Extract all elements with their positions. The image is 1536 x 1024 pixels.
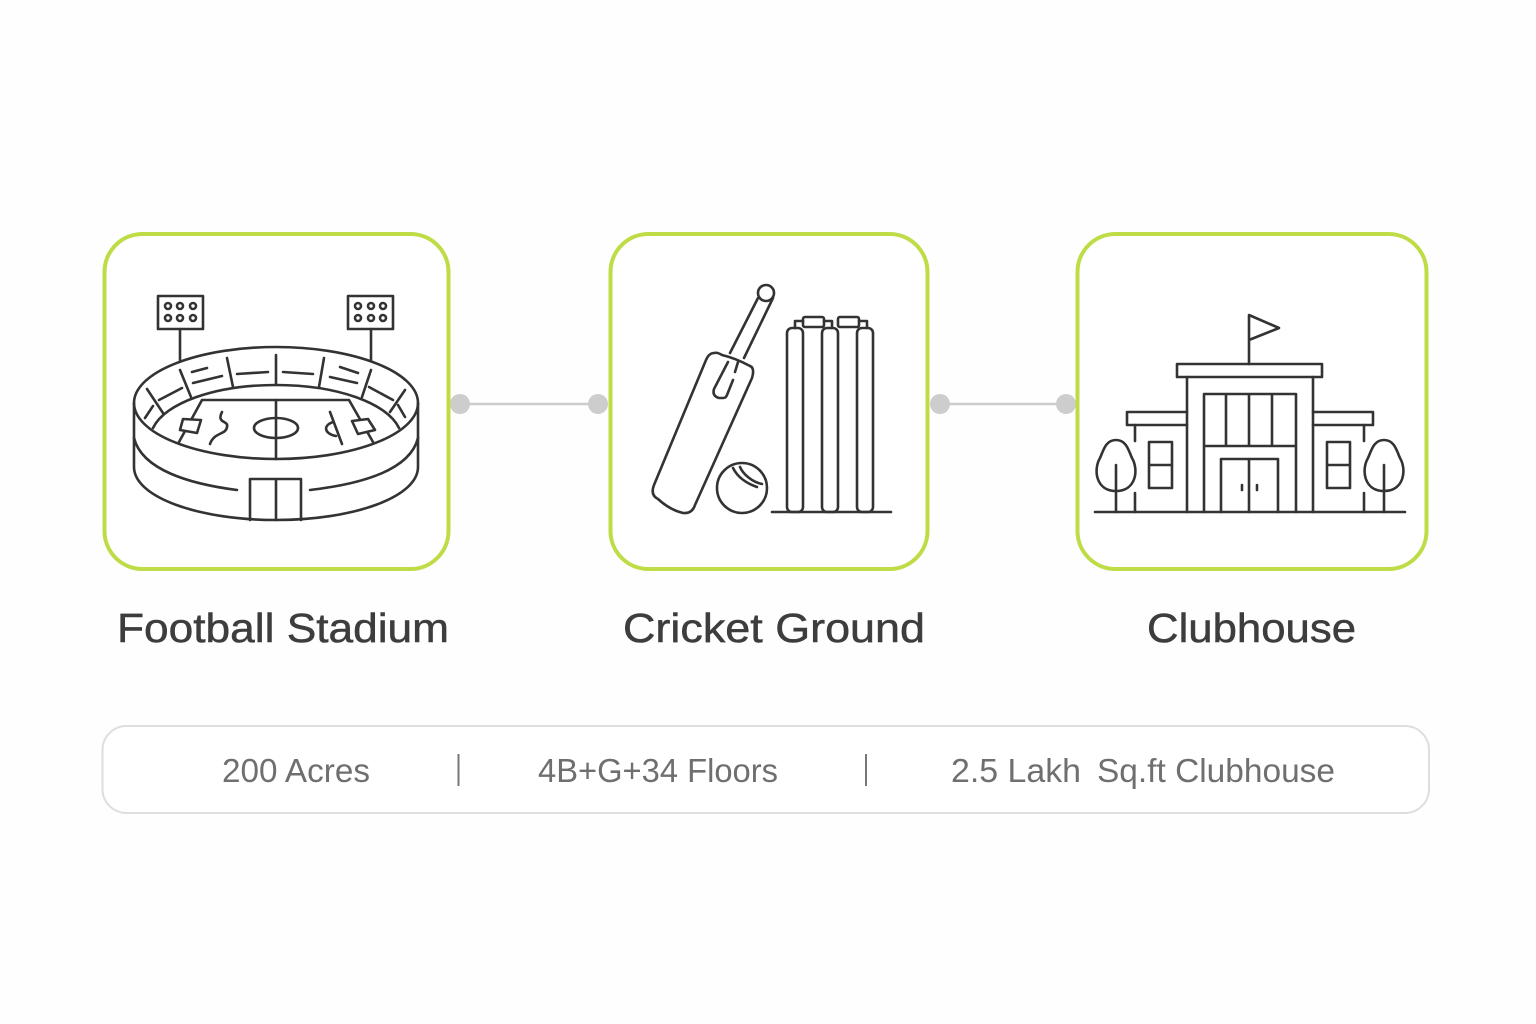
heading: football stadium: Football Stadium	[117, 605, 449, 651]
panel: football stadium card	[104, 234, 448, 569]
stat: floors: 4B+G+34 Floors	[538, 752, 778, 789]
divider: first	[458, 754, 460, 786]
connector: stadium to cricket	[450, 394, 608, 414]
panel: clubhouse card	[1078, 234, 1426, 569]
panel: cricket ground card	[610, 234, 928, 569]
stat: 200 acres: 200 Acres	[222, 752, 370, 789]
icon: football stadium	[134, 296, 418, 520]
stat: clubhouse area: 2.5 Lakh	[951, 752, 1081, 789]
heading: clubhouse: Clubhouse	[1147, 605, 1356, 651]
stat: clubhouse area: Sq.ft Clubhouse	[1097, 752, 1335, 789]
heading: cricket ground: Cricket Ground	[623, 605, 925, 651]
panel: stats bar	[102, 726, 1429, 813]
icon: cricket bat, ball and stumps	[653, 285, 891, 513]
connector: cricket to clubhouse	[930, 394, 1076, 414]
divider: second	[865, 754, 867, 786]
icon: clubhouse building	[1095, 315, 1405, 512]
